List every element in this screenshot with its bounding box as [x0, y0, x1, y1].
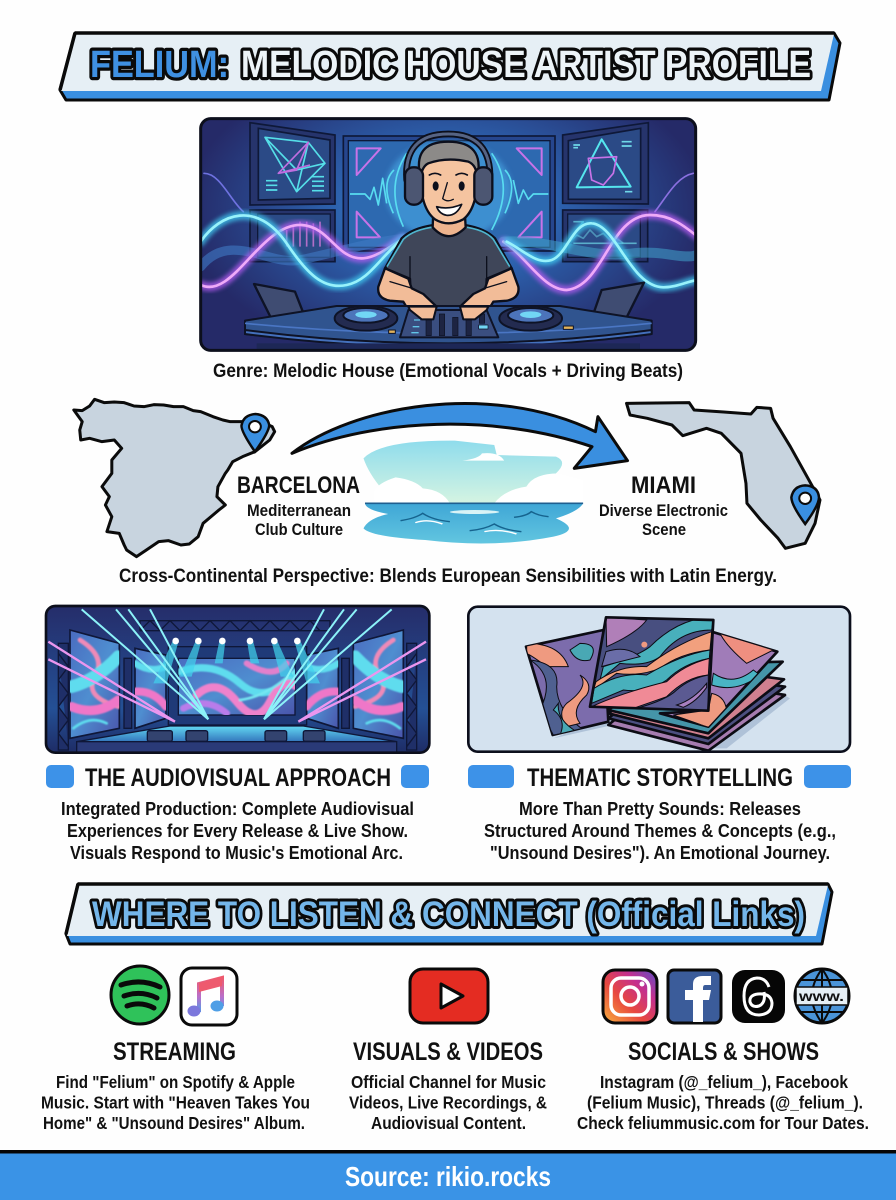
Miami label: Diverse Electronic: [599, 501, 728, 520]
links banner: [66, 884, 832, 944]
section description: "Unsound Desires"). An Emotional Journey.: [490, 842, 830, 863]
streaming description: Music. Start with "Heaven Takes You: [41, 1092, 310, 1112]
section description: [61, 798, 414, 863]
column: visuals and videos: [349, 969, 547, 1133]
section description: [484, 798, 836, 863]
monitors: [250, 123, 648, 262]
visuals description: Audiovisual Content.: [371, 1113, 526, 1133]
Barcelona label: [237, 472, 360, 539]
genre caption: Genre: Melodic House (Emotional Vocals + Driving Beats): [213, 361, 683, 382]
album covers illustration: [468, 607, 850, 752]
links banner: WHERE TO LISTEN & CONNECT (Official Links): [92, 895, 805, 934]
DJ figure: [378, 134, 519, 318]
neon shapes on monitors: [265, 137, 637, 247]
section description: More Than Pretty Sounds: Releases: [519, 798, 801, 819]
Miami label: Scene: [642, 520, 686, 539]
streaming description: Home" & "Unsound Desires" Album.: [43, 1113, 305, 1133]
hero illustration: DJ at decks: [201, 119, 697, 353]
icon: Apple Music: [181, 968, 237, 1025]
title: artist name: FELIUM:: [90, 44, 229, 86]
visuals heading: VISUALS & VIDEOS: [353, 1038, 543, 1066]
Barcelona pin: [241, 414, 269, 452]
cross-continental caption: Cross-Continental Perspective: Blends European Sensibilities with Latin Energy.: [119, 566, 777, 587]
visuals description: [349, 1072, 547, 1133]
title: subject: MELODIC HOUSE ARTIST PROFILE: [241, 44, 811, 86]
Barcelona label: Club Culture: [255, 520, 343, 539]
DJ deck: [245, 306, 652, 353]
section description: Experiences for Every Release & Live Show.: [67, 820, 408, 841]
section heading with blue bars: THEMATIC STORYTELLING: [527, 764, 793, 792]
arrow across the Atlantic: [292, 403, 628, 468]
sound waves: [201, 173, 697, 290]
stage illustration: [46, 606, 429, 753]
streaming heading: STREAMING: [113, 1038, 236, 1066]
footer: source: Source: rikio.rocks: [345, 1161, 551, 1192]
icon: Instagram: [603, 970, 657, 1023]
visuals description: Official Channel for Music: [351, 1072, 546, 1092]
streaming description: Find "Felium" on Spotify & Apple: [56, 1072, 295, 1092]
Barcelona label: BARCELONA: [237, 472, 360, 499]
visuals description: Videos, Live Recordings, &: [349, 1092, 547, 1112]
Miami label: MIAMI: [631, 472, 696, 499]
socials description: [577, 1072, 869, 1133]
icon: Threads: [732, 970, 785, 1023]
streaming description: [41, 1072, 310, 1133]
footer: source: [0, 1150, 896, 1200]
icon: YouTube: [410, 969, 488, 1023]
migration map: Barcelona to Miami: [74, 399, 820, 557]
socials description: Instagram (@_felium_), Facebook: [600, 1072, 848, 1092]
Florida map: [627, 403, 820, 548]
section description: Structured Around Themes & Concepts (e.g.,: [484, 820, 836, 841]
Miami label: [599, 472, 728, 539]
DJ hands over the mixer: [408, 307, 488, 319]
column: socials and shows: [577, 969, 869, 1133]
sea and sky scene: [364, 441, 583, 543]
Miami pin: [791, 485, 819, 524]
socials description: (Felium Music), Threads (@_felium_).: [587, 1092, 863, 1112]
icon: website globe: www.: [798, 988, 844, 1004]
socials description: Check feliummusic.com for Tour Dates.: [577, 1113, 869, 1133]
column: streaming: [41, 966, 310, 1133]
Spain map: [74, 399, 275, 557]
socials heading: SOCIALS & SHOWS: [628, 1038, 819, 1066]
icon: Facebook: [668, 970, 721, 1023]
icon: Spotify: [111, 966, 169, 1024]
section description: Visuals Respond to Music's Emotional Arc.: [70, 842, 403, 863]
icon: website globe: [795, 969, 849, 1023]
title banner: [60, 33, 840, 100]
section description: Integrated Production: Complete Audiovisual: [61, 798, 414, 819]
Barcelona label: Mediterranean: [247, 501, 351, 520]
section heading with blue bars: THE AUDIOVISUAL APPROACH: [85, 764, 391, 792]
panel: audiovisual approach: [46, 606, 429, 863]
panel: thematic storytelling: [468, 607, 851, 863]
laptops: [252, 282, 646, 316]
